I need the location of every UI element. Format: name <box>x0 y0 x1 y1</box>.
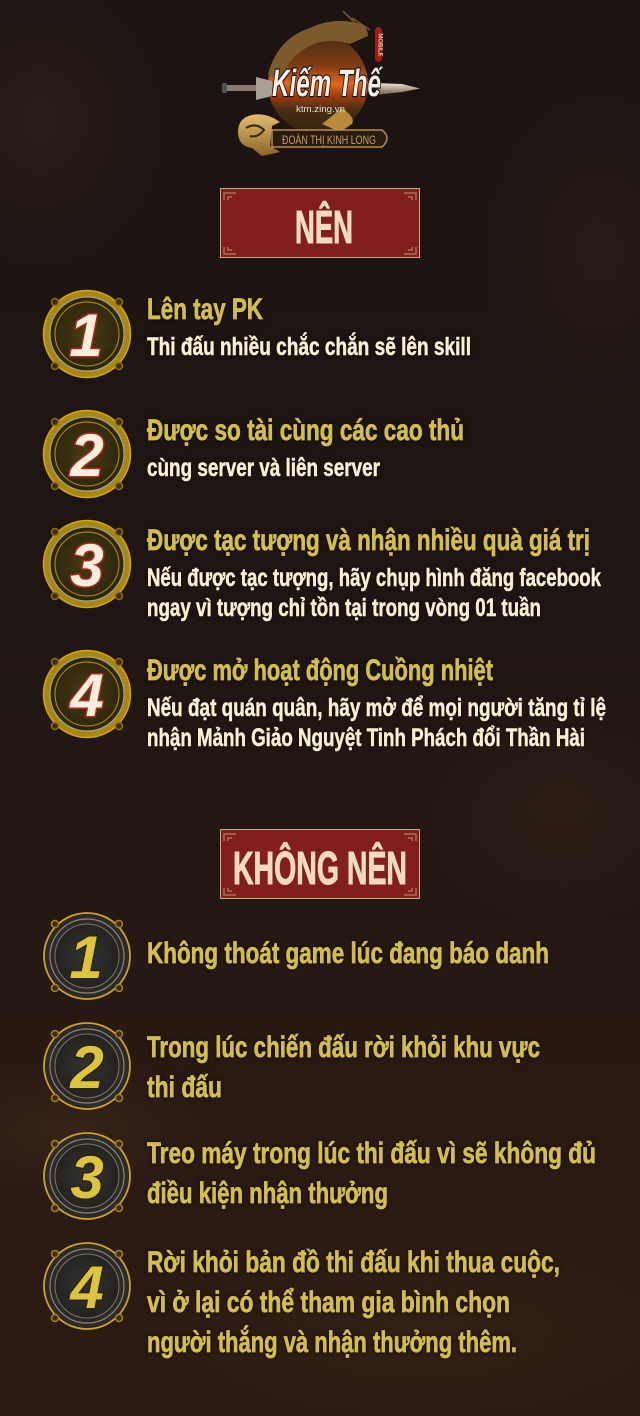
dont 4 text <box>147 1246 560 1359</box>
badge 3: 3 <box>70 532 104 599</box>
logo: url: ktm.zing.vn <box>296 104 345 114</box>
dark badge 2 <box>44 1023 130 1109</box>
item 2 text <box>147 414 464 482</box>
logo: ribbon <box>238 114 387 156</box>
logo: dragon orb <box>268 11 370 134</box>
dark badge 4 <box>44 1243 130 1329</box>
badge 2 <box>44 410 130 498</box>
dont 2 text <box>147 1031 540 1104</box>
dont 4 text: người thắng và nhận thưởng thêm. <box>147 1325 517 1359</box>
item 2 text: Được so tài cùng các cao thủ <box>147 414 464 447</box>
dont 3 text: điều kiện nhận thưởng <box>147 1177 388 1210</box>
heading: KHÔNG NÊN <box>220 830 420 898</box>
badge 3 <box>44 520 130 608</box>
dark badge 4: 4 <box>69 1254 104 1321</box>
item 4 text: Được mở hoạt động Cuồng nhiệt <box>147 654 493 687</box>
dont 3 text <box>147 1137 596 1210</box>
logo: mobile tag <box>375 27 382 62</box>
badge 1: 1 <box>69 302 103 369</box>
logo: mobile tag: MOBILE <box>376 33 382 57</box>
badge 2: 2 <box>69 422 104 489</box>
dark badge 1: 1 <box>69 924 103 991</box>
heading: NÊN <box>220 188 420 258</box>
badge 1 <box>44 290 130 378</box>
logo: sword <box>222 77 420 100</box>
heading: KHÔNG NÊN: KHÔNG NÊN <box>233 842 407 894</box>
logo <box>222 11 420 156</box>
logo: game title: Kiếm Thế <box>272 63 383 105</box>
item 2 text: cùng server và liên server <box>147 454 380 482</box>
item 1 text: Lên tay PK <box>147 293 263 326</box>
dont 2 text: thi đấu <box>147 1071 222 1104</box>
item 1 text <box>147 293 471 361</box>
dark badge 2: 2 <box>69 1034 104 1101</box>
item 3 text <box>147 524 601 622</box>
logo: ribbon: ĐOÀN THỊ KINH LONG <box>282 132 376 147</box>
heading: NÊN: NÊN <box>295 201 353 253</box>
dark badge 3: 3 <box>70 1144 104 1211</box>
badge 4: 4 <box>69 662 104 729</box>
dark badge 3 <box>44 1133 130 1219</box>
item 1 text: Thi đấu nhiều chắc chắn sẽ lên skill <box>147 331 471 361</box>
badge 4 <box>44 650 130 738</box>
dont 4 text: vì ở lại có thể tham gia bình chọn <box>147 1286 510 1319</box>
dark badge 1 <box>44 913 130 999</box>
item 4 text <box>147 654 606 752</box>
